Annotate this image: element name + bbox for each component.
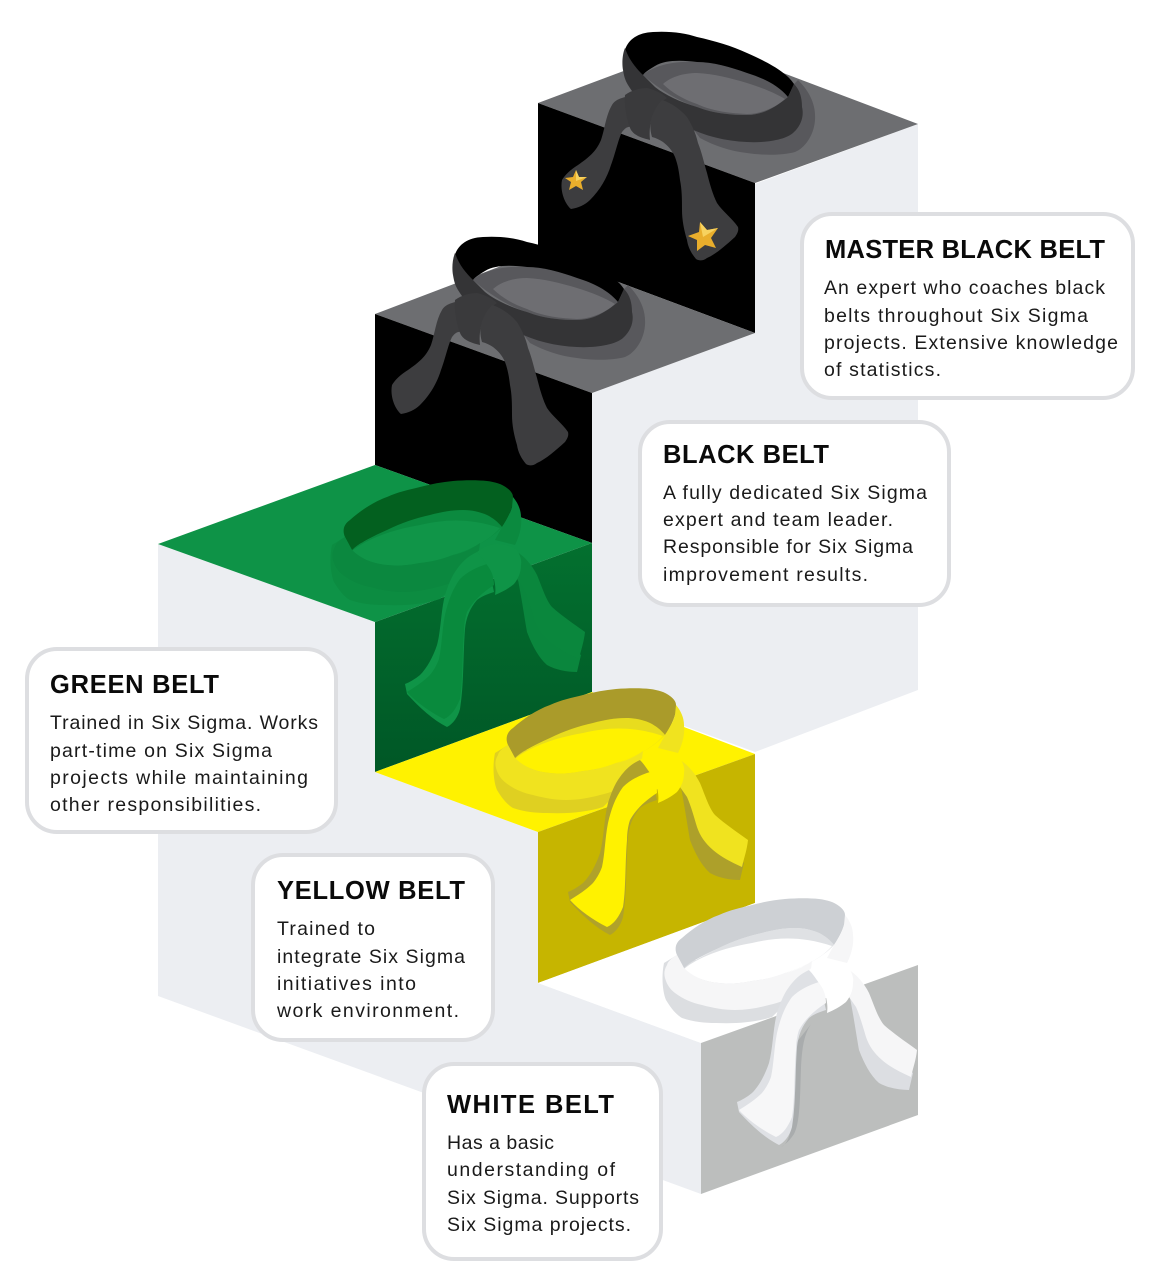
panel: yellow belt bbox=[253, 855, 493, 1040]
text: green belt description: projects while maintaining bbox=[50, 767, 308, 789]
step: yellow belt block bbox=[375, 692, 755, 983]
icon: black belt bbox=[391, 237, 645, 465]
icon: white belt bbox=[663, 898, 917, 1147]
text: master black belt description: of statistics. bbox=[824, 359, 941, 381]
text: black belt description: A fully dedicated Six Sigma bbox=[663, 482, 927, 504]
text: master black belt description: projects. Extensive knowledge bbox=[824, 332, 1118, 354]
text: yellow belt description: initiatives into bbox=[277, 973, 416, 995]
step: green belt block bbox=[158, 465, 592, 772]
text: master black belt description: An expert who coaches black bbox=[824, 277, 1105, 299]
panel: green belt bbox=[27, 649, 336, 832]
text: white belt description: Six Sigma. Supports bbox=[447, 1187, 639, 1209]
heading: yellow belt: YELLOW BELT bbox=[277, 877, 465, 905]
panel: white belt bbox=[424, 1064, 661, 1259]
heading: black belt: BLACK BELT bbox=[663, 441, 829, 469]
text: green belt description: Trained in Six Sigma. Works bbox=[50, 712, 318, 734]
heading: white belt: WHITE BELT bbox=[447, 1091, 614, 1119]
icon: gold star left bbox=[565, 170, 587, 190]
text: white belt description: understanding of bbox=[447, 1159, 616, 1181]
heading: master black belt: MASTER BLACK BELT bbox=[825, 236, 1105, 264]
text: white belt description: Six Sigma projects. bbox=[447, 1214, 631, 1236]
text: master black belt description: belts throughout Six Sigma bbox=[824, 305, 1088, 327]
text: black belt description: expert and team leader. bbox=[663, 509, 893, 531]
text: black belt description: improvement results. bbox=[663, 564, 868, 586]
panel: master black belt bbox=[802, 214, 1133, 398]
text: green belt description: part-time on Six Sigma bbox=[50, 740, 272, 762]
text: black belt description: Responsible for Six Sigma bbox=[663, 536, 913, 558]
step: white belt block bbox=[538, 903, 918, 1194]
text: white belt description bbox=[447, 1132, 639, 1236]
text: yellow belt description: work environment. bbox=[276, 1000, 459, 1022]
icon: gold star right bbox=[688, 222, 718, 251]
text: yellow belt description: Trained to bbox=[277, 918, 375, 940]
step: black belt block bbox=[375, 252, 755, 543]
text: yellow belt description bbox=[276, 918, 465, 1022]
panel: black belt bbox=[640, 422, 949, 605]
text: green belt description bbox=[50, 712, 318, 816]
heading: green belt: GREEN BELT bbox=[50, 671, 219, 699]
icon: green belt bbox=[331, 480, 585, 727]
text: white belt description: Has a basic bbox=[447, 1132, 554, 1154]
icon: master black belt bbox=[561, 32, 815, 260]
staircase side faces bbox=[158, 124, 918, 1194]
text: master black belt description bbox=[824, 277, 1118, 381]
icon: yellow belt bbox=[494, 688, 748, 935]
text: green belt description: other responsibilities. bbox=[50, 794, 261, 816]
text: yellow belt description: integrate Six Sigma bbox=[277, 946, 465, 968]
step: master black belt block bbox=[538, 42, 918, 333]
text: black belt description bbox=[663, 482, 927, 586]
